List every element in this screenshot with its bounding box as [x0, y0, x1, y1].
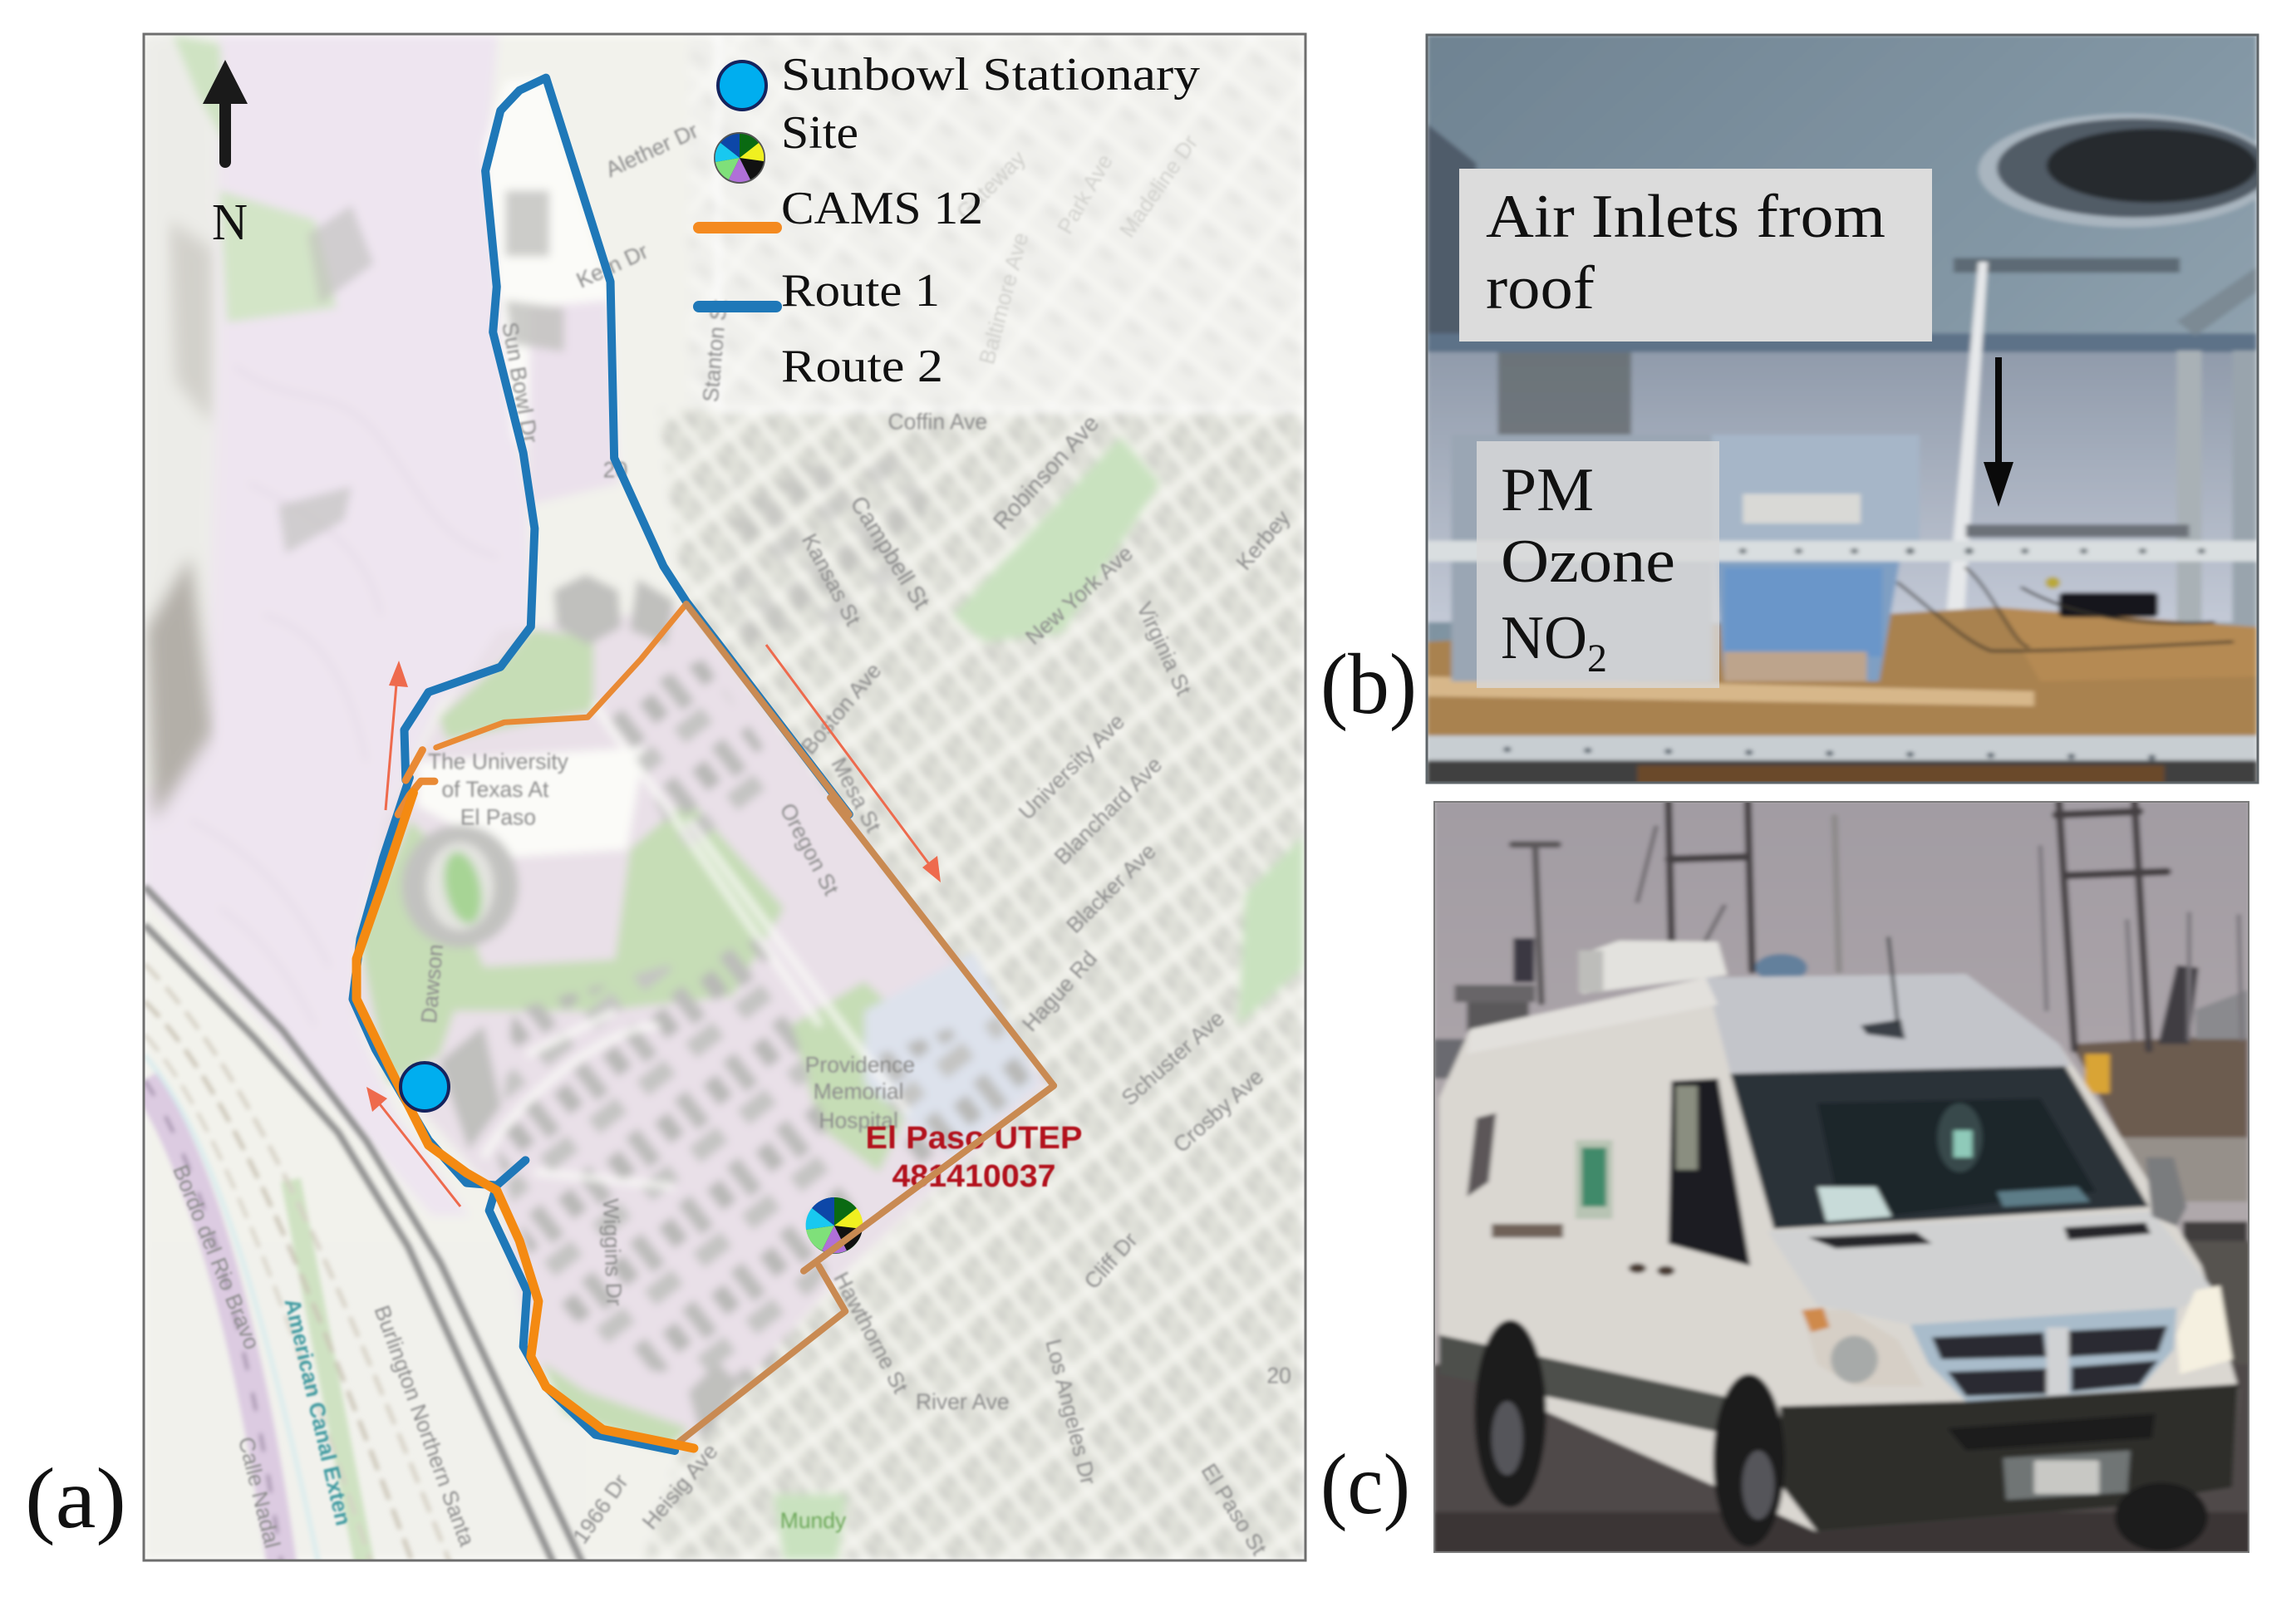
- map: street labels: Park Ave: [1052, 150, 1118, 238]
- marker: CAMS 12 pie: [806, 1197, 863, 1254]
- map: street labels: American Canal Exten: [280, 1296, 356, 1528]
- map: street labels: Wiggins Dr: [598, 1198, 627, 1306]
- legend: [699, 49, 1200, 392]
- map: street labels: University Ave: [1014, 709, 1129, 824]
- map: street labels: Virginia St: [1132, 598, 1197, 700]
- map: street labels: Schuster Ave: [1117, 1005, 1229, 1110]
- map: street labels: Kerbey: [1231, 505, 1295, 575]
- direction arrows (red): [366, 645, 941, 1206]
- photo frame c: [1434, 802, 2249, 1552]
- photo: van: [1433, 800, 2251, 1554]
- callout: measured pollutants: Ozone: [1501, 528, 1675, 596]
- map: street labels: Heisig Ave: [637, 1439, 723, 1534]
- map: street labels: [168, 118, 1295, 1560]
- legend line: blue: [699, 301, 776, 312]
- stadium: [401, 825, 519, 948]
- map: street labels: Robinson Ave: [987, 410, 1104, 534]
- photo: shelf interior: [1427, 35, 2276, 785]
- map: street labels: Sun Bowl Dr: [497, 320, 543, 445]
- photo frame b: [1427, 35, 2258, 783]
- north arrow: N: [212, 194, 248, 251]
- callout: air inlets: roof: [1486, 254, 1595, 322]
- marker: Sunbowl stationary site: [401, 1063, 449, 1111]
- map: canal and railway corridor: [145, 887, 586, 1570]
- legend text: [781, 49, 1200, 392]
- callout: measured pollutants: 2: [1587, 636, 1607, 681]
- map: street labels: Kern Dr: [573, 238, 651, 293]
- legend icon: CAMS 12 pie: [715, 133, 765, 183]
- callout: air inlets: Air Inlets from: [1486, 183, 1885, 251]
- map: street labels: 20: [603, 458, 627, 483]
- map: street labels: Memorial: [814, 1079, 903, 1103]
- panel: mobile lab van photo (c): [1433, 800, 2251, 1554]
- map: street labels: Mesa St: [826, 754, 887, 837]
- map: street labels: Mundy: [780, 1508, 847, 1533]
- map frame: [144, 34, 1305, 1560]
- map: street labels: Bordo del Rio Bravo: [168, 1161, 265, 1353]
- map base layers: [144, 35, 1304, 1560]
- map: street labels: Providence: [805, 1053, 915, 1078]
- map: street labels: Baltimore Ave: [974, 230, 1033, 367]
- route 2 / CAMS loop (orange): [356, 604, 1054, 1448]
- map: street labels: Blacker Ave: [1061, 838, 1161, 938]
- panel label (c): (c): [1320, 1437, 1410, 1532]
- legend text: CAMS 12: [781, 183, 983, 234]
- map: street labels: Hawthorne St: [828, 1268, 913, 1398]
- map: street labels: 1966 Dr: [568, 1470, 633, 1548]
- map: street labels: Madeline Dr: [1114, 130, 1202, 242]
- route 1 (blue): [352, 78, 849, 1451]
- legend text: Route 1: [781, 265, 940, 317]
- map: street labels: Hague Rd: [1017, 946, 1102, 1036]
- map: street labels: Alether Dr: [602, 118, 702, 182]
- panel label (a): (a): [25, 1451, 126, 1546]
- callout: measured pollutants: PM: [1501, 456, 1594, 524]
- map: street labels: Calle Nadal: [234, 1434, 285, 1550]
- map: street labels: Stanton St: [698, 298, 732, 403]
- map: street labels: Hospital: [819, 1108, 898, 1133]
- label: El Paso UTEP monitor: El Paso UTEP: [866, 1121, 1082, 1156]
- map: street labels: The University: [428, 749, 569, 774]
- panel label (b): (b): [1320, 636, 1417, 732]
- map: street labels: River Ave: [916, 1389, 1010, 1414]
- map: street labels: of Texas At: [441, 777, 549, 802]
- map: street labels: Dawson: [416, 943, 448, 1025]
- panel: map (a): [144, 34, 1305, 1570]
- callout: measured pollutants: NO: [1501, 604, 1587, 672]
- map: street labels: New York Ave: [1020, 541, 1138, 650]
- map: street labels: Oregon St: [775, 799, 844, 900]
- map: street labels: El Paso St: [1197, 1459, 1272, 1560]
- map: street labels: Campbell St: [845, 491, 936, 613]
- map: street labels: Kansas St: [797, 529, 866, 630]
- callout: air inlets: [1459, 169, 1932, 342]
- legend icon: stationary site: [718, 61, 766, 110]
- map: street labels: Los Angeles Dr: [1040, 1337, 1101, 1487]
- map: street labels: Coffin Ave: [888, 410, 987, 435]
- map: street labels: Boston Ave: [796, 658, 886, 759]
- callout: measured pollutants: [1477, 441, 1719, 688]
- north arrow: [203, 60, 248, 251]
- map: street labels: Cliff Dr: [1079, 1227, 1143, 1294]
- label: El Paso UTEP monitor: [867, 1125, 1082, 1188]
- legend text: Sunbowl Stationary: [781, 49, 1200, 101]
- map: street labels: Blanchard Ave: [1050, 752, 1167, 869]
- panel: instrument shelf photo (b): [1427, 35, 2276, 785]
- map: street labels: Crosby Ave: [1168, 1064, 1268, 1157]
- legend text: Site: [781, 107, 858, 159]
- map: street labels: El Paso: [460, 805, 536, 830]
- label: El Paso UTEP monitor: 481410037: [892, 1159, 1055, 1194]
- map: street labels: Burlington Northern Santa: [370, 1302, 479, 1550]
- legend line: orange: [699, 222, 776, 233]
- map: street labels: Gateway: [951, 145, 1031, 224]
- map: street labels: 20: [1266, 1363, 1291, 1388]
- arrow: inlet to instruments: [1984, 357, 2013, 507]
- legend text: Route 2: [781, 341, 943, 392]
